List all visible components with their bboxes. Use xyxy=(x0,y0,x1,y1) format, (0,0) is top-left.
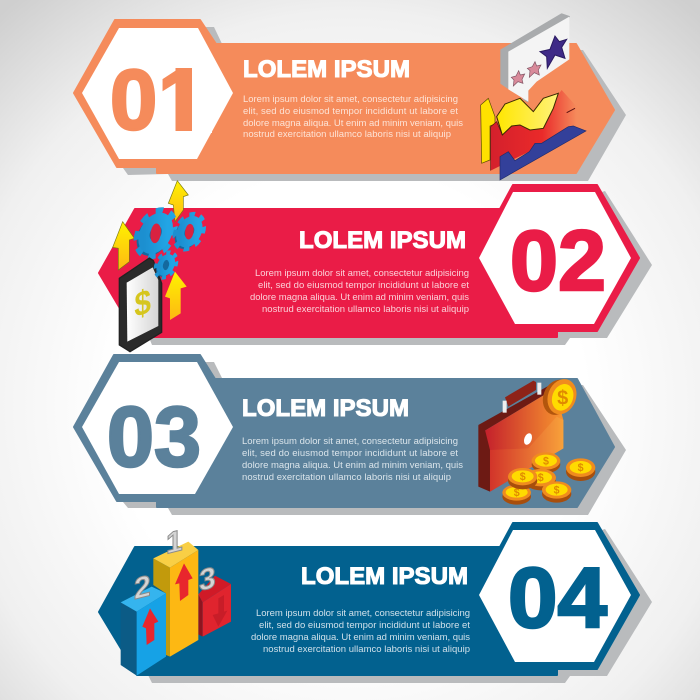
podium step 2 xyxy=(121,569,166,676)
icon: tablet xyxy=(119,258,162,352)
icon: small coins xyxy=(502,452,595,505)
icon: small coins: $ xyxy=(543,455,549,467)
text block 01 xyxy=(243,94,463,140)
hexagon 04 xyxy=(479,530,631,662)
icon: small coins: $ xyxy=(578,462,584,474)
hexagon 03 xyxy=(82,362,233,494)
podium step 1 xyxy=(153,523,198,657)
podium step 3 xyxy=(198,560,231,637)
podium step 3: 3 xyxy=(199,560,216,598)
icon: large coin: $ xyxy=(557,387,568,409)
heading 04: LOLEM IPSUM xyxy=(301,563,468,590)
text block 04 xyxy=(251,608,470,655)
icon: podium xyxy=(121,523,231,676)
number 01: 1 xyxy=(158,53,205,148)
text block 01: elit, sed do eiusmod tempor incididunt ut labore et xyxy=(243,106,458,117)
icon: medium gear xyxy=(175,211,203,253)
text block 02: Lorem ipsum dolor sit amet, consectetur adipisicing xyxy=(255,268,469,279)
text block 04: nostrud exercitation ullamco laboris nisi ut aliquip xyxy=(263,644,470,655)
text block 04: Lorem ipsum dolor sit amet, consectetur adipisicing xyxy=(256,608,470,619)
icon: small coins: $ xyxy=(538,472,544,484)
panel 04 xyxy=(99,523,652,683)
icon: small gear xyxy=(156,250,176,280)
heading 02: LOLEM IPSUM xyxy=(299,227,466,254)
text block 04: elit, sed do eiusmod tempor incididunt ut labore et xyxy=(259,620,470,631)
icon: small coins: $ xyxy=(554,484,560,496)
text block 04: dolore magna aliqua. Ut enim ad minim veniam, quis xyxy=(251,632,470,643)
number 03: 03 xyxy=(107,390,201,485)
hexagon 01 xyxy=(82,28,233,159)
text block 02: nostrud exercitation ullamco laboris nisi ut aliquip xyxy=(262,304,469,315)
text block 01: Lorem ipsum dolor sit amet, consectetur adipisicing xyxy=(243,94,458,105)
number 02: 02 xyxy=(510,214,606,309)
text block 03: elit, sed do eiusmod tempor incididunt ut labore et xyxy=(242,448,458,459)
icon: speech bubble and chart xyxy=(481,14,586,180)
icon: large gear xyxy=(137,206,174,261)
text block 01: dolore magna aliqua. Ut enim ad minim veniam, quis xyxy=(243,118,463,129)
text block 02: elit, sed do eiusmod tempor incididunt ut labore et xyxy=(258,280,469,291)
number 04: 04 xyxy=(508,551,607,646)
icon: small coins: $ xyxy=(520,471,526,483)
icon: tablet: $ xyxy=(134,282,151,326)
icon: gears, arrows and tablet xyxy=(113,181,203,352)
icon: briefcase and coins xyxy=(478,375,595,505)
heading 01: LOLEM IPSUM xyxy=(243,56,410,83)
panel 01 xyxy=(74,14,626,181)
podium step 2: 2 xyxy=(134,569,151,606)
text block 02 xyxy=(250,268,469,315)
panel 02 xyxy=(99,181,652,352)
panel 03 xyxy=(74,355,626,515)
text block 03 xyxy=(242,436,463,483)
text block 03: dolore magna aliqua. Ut enim ad minim veniam, quis xyxy=(242,460,463,471)
number 01: 0 xyxy=(110,53,157,148)
podium step 1: 1 xyxy=(166,523,183,561)
text block 01: nostrud exercitation ullamco laboris nisi ut aliquip xyxy=(243,129,451,140)
heading 03: LOLEM IPSUM xyxy=(242,395,409,422)
icon: small coins: $ xyxy=(514,487,520,499)
text block 02: dolore magna aliqua. Ut enim ad minim veniam, quis xyxy=(250,292,469,303)
number 01 xyxy=(110,53,212,148)
hexagon 02 xyxy=(479,192,631,324)
text block 03: Lorem ipsum dolor sit amet, consectetur adipisicing xyxy=(242,436,458,447)
text block 03: nostrud exercitation ullamco laboris nisi ut aliquip xyxy=(242,472,451,483)
